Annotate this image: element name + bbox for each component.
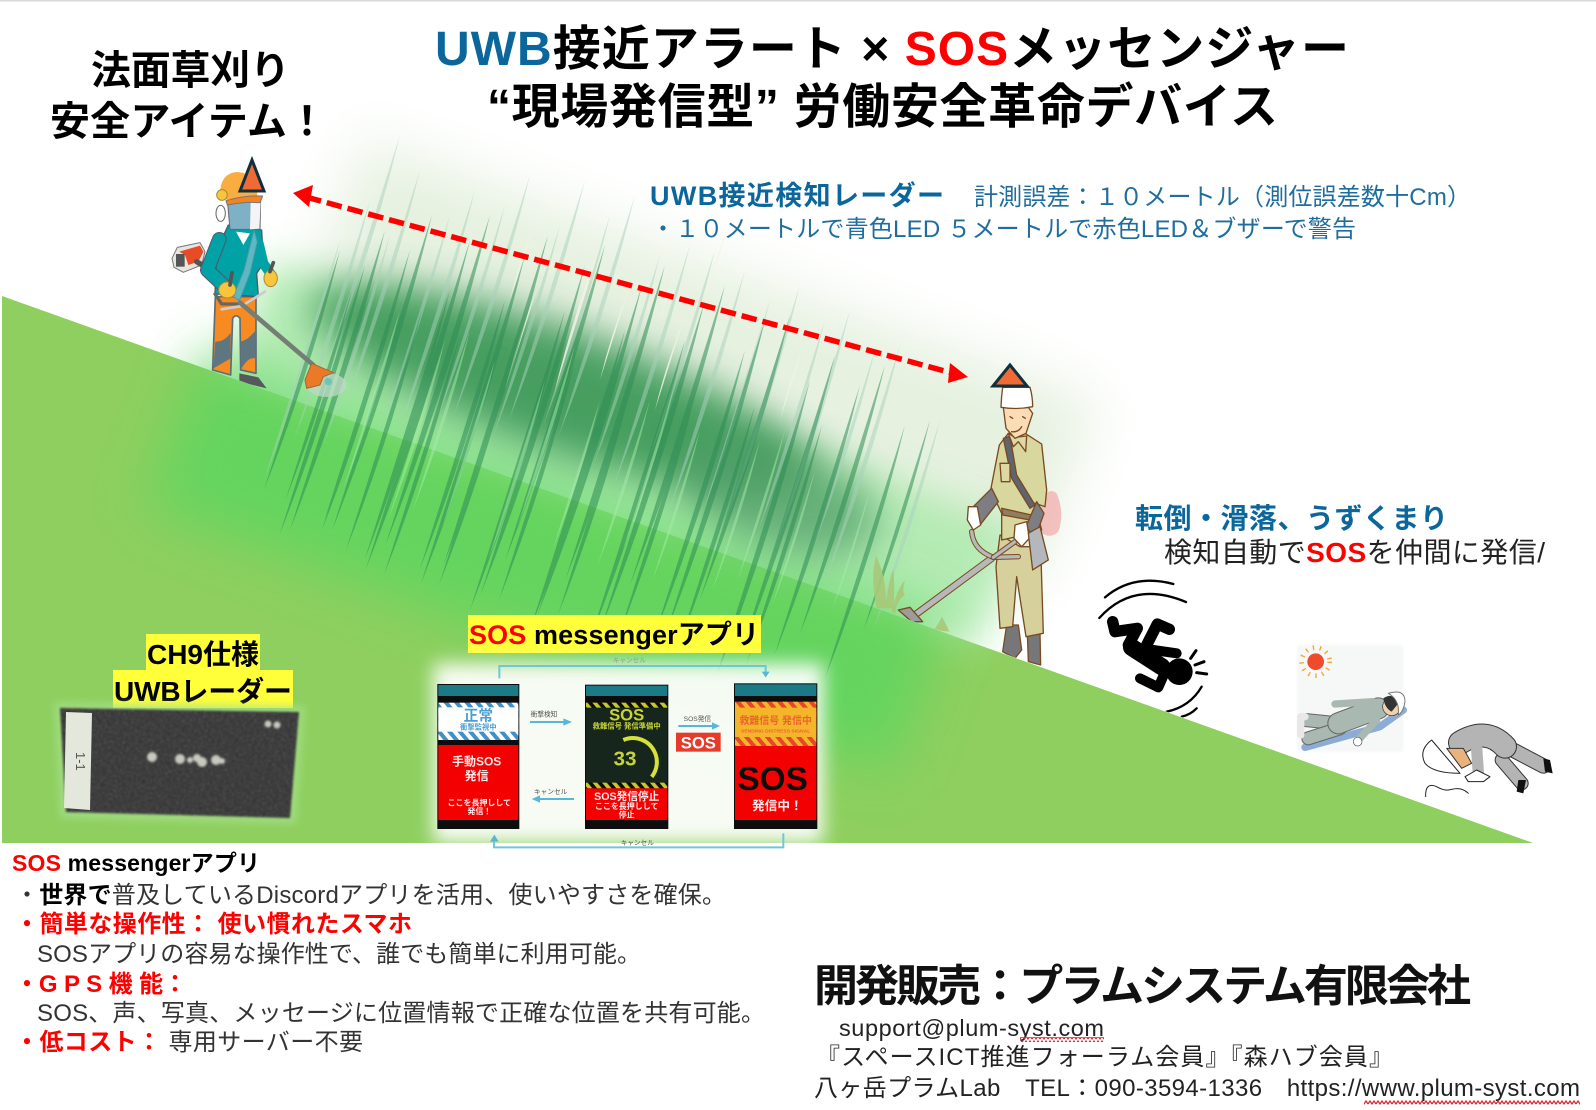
- collapsed worker in the sun: [1297, 645, 1405, 752]
- title: UWB接近アラート × SOSメッセンジャー: [435, 23, 1349, 76]
- app flow diagram: キャンセル: [534, 788, 568, 796]
- feature: easy operation: ・簡単な操作性： 使い慣れたスマホ: [15, 911, 412, 938]
- app flow diagram: キャンセル: [621, 839, 654, 847]
- helmet and face shield: [216, 172, 263, 229]
- vendor heading: 開発販売：プラムシステム有限会社: [814, 962, 1471, 1011]
- boots and legs: [996, 535, 1043, 665]
- grass blades: pale tips: [264, 135, 940, 630]
- sun: [1302, 648, 1330, 676]
- flow arrows: [494, 666, 783, 847]
- trimmer shaft and cutter: [240, 303, 347, 397]
- fall icon: [1099, 581, 1207, 717]
- title: “現場発信型” 労働安全革命デバイス: [487, 81, 1278, 134]
- figure: [1301, 692, 1405, 747]
- UWB radar description: [650, 180, 1471, 243]
- phone: normal state: 正常: [464, 708, 493, 725]
- feature: GPS: [15, 971, 765, 1027]
- torso: [967, 433, 1048, 570]
- grass blades: dark: [264, 215, 930, 680]
- title: [435, 23, 1349, 134]
- feature: low cost: ・低コスト： 専用サーバー不要: [15, 1029, 363, 1056]
- vendor contact details: [814, 1015, 1580, 1105]
- phone: sending state: 救難信号 発信中: [739, 714, 812, 727]
- app flow diagram: 衝撃検知: [531, 710, 558, 719]
- body: [207, 225, 277, 388]
- fall detection description: 転倒・滑落、うずくまり: [1135, 503, 1448, 534]
- UWB radar description: ・１０メートルで青色LED ５メートルで赤色LED＆ブザーで警告: [651, 216, 1356, 243]
- phone: countdown state: 33: [614, 747, 636, 770]
- phone: sending state: [734, 683, 817, 829]
- slogan: [50, 49, 327, 144]
- crouching worker: [1423, 736, 1553, 797]
- worker with trimmer, left: [172, 172, 347, 397]
- feature: GPS: SOS、声、写真、メッセージに位置情報で正確な位置を共有可能。: [37, 1000, 765, 1027]
- phone: normal state: 衝撃監視中: [460, 722, 497, 731]
- phone: countdown state: ここを長押しして: [595, 801, 658, 811]
- label: CH9 UWB radar: UWBレーダー: [114, 675, 292, 707]
- feature heading: SOS messengerアプリ: [12, 850, 260, 876]
- engine backpack: [172, 243, 205, 272]
- feature: easy operation: SOSアプリの容易な操作性で、誰でも簡単に利用可能。: [37, 941, 641, 968]
- worker with trimmer, right: [873, 387, 1061, 665]
- sensor marker, left worker: [240, 160, 264, 191]
- UWB radar description: 計測誤差：１０メートル（測位誤差数十Cm）: [974, 184, 1471, 211]
- green slope: [2, 296, 1533, 843]
- phone: countdown state: 停止: [619, 809, 635, 819]
- vendor contact details: 『スペースICT推進フォーラム会員』『森ハブ会員』: [816, 1044, 1393, 1071]
- trimmer shaft: [898, 532, 1018, 622]
- grass tufts: [873, 556, 949, 632]
- label: CH9 UWB radar: [113, 634, 293, 708]
- phone: countdown state: SOS発信停止: [594, 790, 660, 803]
- backpack: [1040, 491, 1061, 536]
- app flow diagram: キャンセル: [613, 657, 646, 665]
- feature: easy operation: [15, 911, 641, 968]
- phone: sending state: SENDING DISTRESS SIGNAL: [741, 729, 810, 735]
- UWB radar description: UWB接近検知レーダー: [650, 180, 944, 211]
- phone: normal state: [437, 684, 519, 829]
- label: SOS messenger app: SOS messengerアプリ: [469, 620, 759, 650]
- SOS badge: SOS: [681, 733, 716, 752]
- phone: countdown state: SOS: [609, 706, 644, 725]
- vendor contact details: 八ヶ岳プラムLab TEL：090-3594-1336 https://www.plum-syst.com: [814, 1075, 1580, 1102]
- UWB distance arrow: [293, 185, 968, 383]
- phone: normal state: 手動SOS: [452, 754, 501, 769]
- fall detection description: 検知自動でSOSを仲間に発信/: [1164, 537, 1545, 568]
- grass blades: cream gaps: [505, 225, 804, 420]
- sensor marker, right worker: [993, 365, 1027, 386]
- feature: GPS: ・G P S 機 能：: [15, 971, 187, 998]
- feature: worldwide app: ・世界で普及しているDiscordアプリを活用、使いやすさを確保。: [15, 882, 726, 909]
- radar device photo: 1-1: [73, 752, 88, 771]
- app flow diagram: [433, 657, 823, 847]
- vendor contact details: support@plum-syst.com: [839, 1015, 1104, 1041]
- features text block: [12, 850, 765, 1056]
- grass blades: light: [343, 310, 870, 610]
- slogan: 法面草刈り: [91, 49, 290, 93]
- slogan: 安全アイテム！: [50, 100, 327, 144]
- phone: sending state: 発信中！: [752, 798, 803, 813]
- phone: sending state: SOS: [737, 761, 808, 798]
- fall detection description: [1135, 503, 1545, 568]
- head and helmet: [1001, 387, 1033, 438]
- app flow diagram: SOS発信: [684, 714, 711, 723]
- phone: countdown state: [585, 685, 668, 829]
- radar device photo: [54, 702, 305, 824]
- phone: normal state: 発信！: [467, 806, 491, 816]
- phone: normal state: ここを長押しして: [448, 797, 511, 807]
- grass field: [147, 111, 1098, 796]
- label: CH9 UWB radar: CH9仕様: [147, 639, 259, 670]
- phone: countdown state: 救難信号 発信準備中: [593, 722, 661, 731]
- phone: normal state: 発信: [465, 768, 489, 783]
